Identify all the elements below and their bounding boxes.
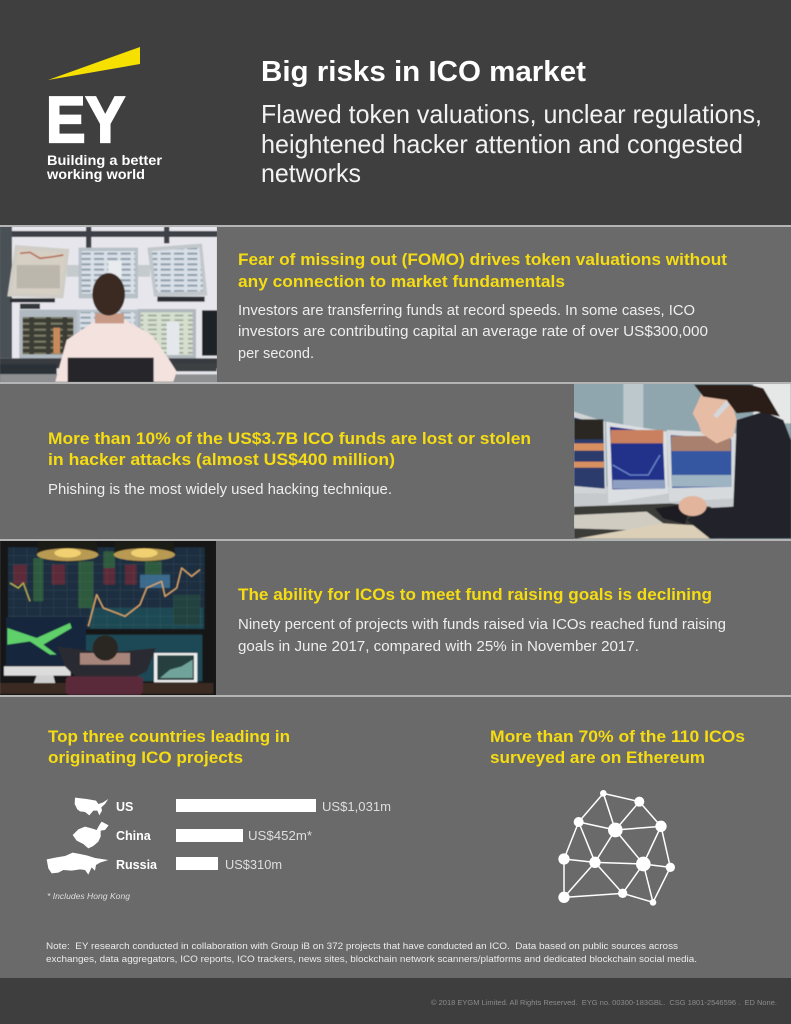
icon: US map <box>75 798 108 815</box>
heading: Ethereum share <box>490 728 745 767</box>
heading: top three countries: Top three countries leading in <box>48 728 290 746</box>
subtitle <box>261 99 762 188</box>
heading: Ethereum share: surveyed are on Ethereum <box>490 749 705 767</box>
bar: US <box>176 799 316 812</box>
note <box>46 941 697 965</box>
heading: top three countries <box>48 728 290 767</box>
icon: Russia map <box>47 853 108 875</box>
panel 2 heading <box>48 430 531 469</box>
EY logo: EY <box>46 83 125 156</box>
panel 3 body <box>238 617 726 655</box>
panel 2 text <box>48 430 531 498</box>
panel 1 body <box>238 303 708 362</box>
photo: woman with headset at monitors <box>570 380 791 542</box>
panel 1 body: per second. <box>238 346 314 362</box>
panel 1 heading: any connection to market fundamentals <box>238 273 565 291</box>
dividers <box>0 225 791 697</box>
panel 2 heading: More than 10% of the US$3.7B ICO funds are lost or stolen <box>48 430 531 448</box>
label: US: US <box>116 800 133 814</box>
subtitle: Flawed token valuations, unclear regulations, <box>261 99 762 129</box>
panel 1 body: investors are contributing capital an average rate of over US$300,000 <box>238 324 708 340</box>
subtitle: heightened hacker attention and congested <box>261 129 743 159</box>
title: Big risks in ICO market <box>261 56 586 88</box>
EY logo: working world <box>46 166 145 182</box>
subtitle: networks <box>261 158 361 188</box>
value: Russia: US$310m <box>225 857 282 872</box>
icon: network diagram <box>558 790 675 906</box>
panel 3 heading: The ability for ICOs to meet fund raising goals is declining <box>238 586 712 604</box>
heading: top three countries: originating ICO projects <box>48 749 243 767</box>
value: China: US$452m* <box>248 828 312 843</box>
copyright: © 2018 EYGM Limited. All Rights Reserved. EYG no. 00300-183GBL. CSG 1801-2546596 . ED None. <box>431 999 777 1007</box>
value: US: US$1,031m <box>322 799 391 814</box>
bar: Russia <box>176 857 218 870</box>
footer band <box>0 978 791 1024</box>
footnote: * Includes Hong Kong <box>47 891 130 901</box>
panel 3 text <box>238 586 726 655</box>
label: Russia: Russia <box>116 858 158 872</box>
icon: China map <box>73 822 109 848</box>
panel 1 heading: Fear of missing out (FOMO) drives token valuations without <box>238 251 728 269</box>
header band <box>0 0 791 225</box>
heading: Ethereum share: More than 70% of the 110 ICOs <box>490 728 745 746</box>
photo: trader at six monitors <box>0 225 217 385</box>
panel 2 body: Phishing is the most widely used hacking technique. <box>48 482 392 498</box>
panel 1 text <box>238 251 728 362</box>
note: Note: EY research conducted in collaboration with Group iB on 372 projects that have conducted an ICO. Data based on public sources across <box>46 941 678 952</box>
EY logo <box>46 47 163 182</box>
bar chart: countries <box>47 798 391 875</box>
panel 1 heading <box>238 251 728 291</box>
panel 3 body: Ninety percent of projects with funds raised via ICOs reached fund raising <box>238 617 726 633</box>
bar: China <box>176 829 243 842</box>
panel 3 body: goals in June 2017, compared with 25% in November 2017. <box>238 639 639 655</box>
photo: trader relaxing before chart wall <box>0 538 217 698</box>
panel 1 body: Investors are transferring funds at record speeds. In some cases, ICO <box>238 303 695 319</box>
panel 2 heading: in hacker attacks (almost US$400 million) <box>48 451 395 469</box>
label: China: China <box>116 829 152 843</box>
note: exchanges, data aggregators, ICO reports, ICO trackers, news sites, blockchain network scanners/platforms and dedicated blockchain social media. <box>46 954 697 965</box>
EY logo: Building a better <box>47 152 163 168</box>
